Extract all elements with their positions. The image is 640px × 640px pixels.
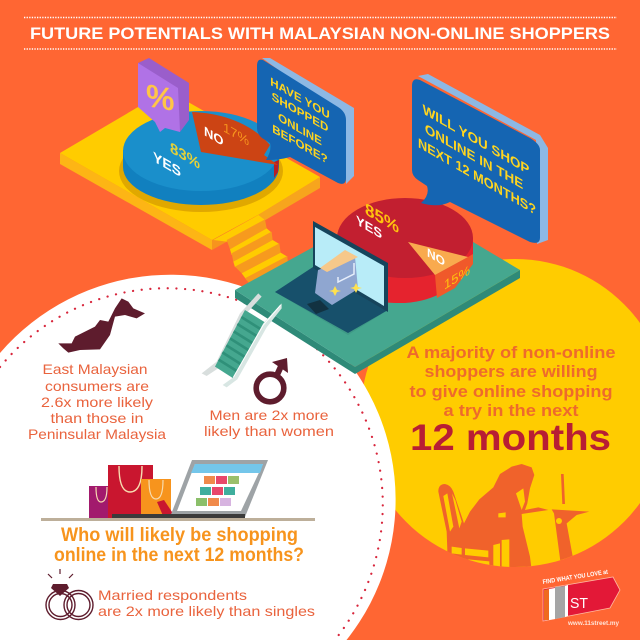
heading: who will likely be shopping bbox=[54, 524, 304, 566]
statement: majority of non-online shoppers: to give online shopping bbox=[410, 383, 612, 401]
question text: HAVE YOU bbox=[270, 75, 330, 122]
icon: shopping bag bbox=[315, 250, 362, 305]
text: East Malaysian consumers bbox=[28, 361, 166, 442]
question text: SHOPPED bbox=[272, 89, 328, 135]
question text: WILL YOU SHOP bbox=[423, 102, 530, 179]
text: married respondents: Married respondents bbox=[98, 587, 247, 603]
text: married respondents bbox=[98, 587, 315, 619]
text: East Malaysian consumers: 2.6x more likely bbox=[41, 394, 153, 410]
yellow circle background bbox=[361, 259, 640, 567]
text: men more likely bbox=[204, 407, 334, 439]
icon: male symbol bbox=[256, 358, 288, 402]
question text: ONLINE bbox=[278, 110, 322, 148]
pie label: 17% no: 17% bbox=[223, 119, 249, 149]
text: East Malaysian consumers: Peninsular Malaysia bbox=[28, 426, 166, 442]
question text: BEFORE? bbox=[272, 122, 328, 167]
big text: 12 months: 12 months bbox=[410, 417, 611, 458]
pie label: 83% yes: YES bbox=[153, 149, 181, 181]
icon: percent bubble bbox=[138, 58, 189, 132]
text: East Malaysian consumers: consumers are bbox=[45, 378, 149, 394]
silhouette: woman at desk bbox=[438, 464, 589, 570]
statement: majority of non-online shoppers: A majority of non-online bbox=[406, 344, 616, 362]
yellow staircase bbox=[213, 215, 288, 285]
pie chart: have you shopped online bbox=[119, 111, 283, 212]
icon: map of Malaysia bbox=[58, 298, 145, 353]
statement: majority of non-online shoppers bbox=[406, 344, 616, 458]
pie label: 85% yes: 85% bbox=[365, 198, 399, 237]
red bag bbox=[108, 465, 153, 518]
speech bubble: have you shopped online before bbox=[257, 58, 354, 184]
pie label: 85% yes: YES bbox=[356, 212, 382, 242]
heading: who will likely be shopping: Who will likely be shopping bbox=[61, 524, 298, 546]
pie label: 15% no: 15% bbox=[444, 263, 470, 294]
pie label: 17% no bbox=[204, 119, 249, 149]
green platform bbox=[235, 199, 520, 374]
laptop bbox=[170, 460, 268, 517]
pie label: 17% no: NO bbox=[204, 123, 224, 149]
pie chart: will you shop online bbox=[337, 198, 473, 303]
title: FUTURE POTENTIALS WITH MALAYSIAN NON-ONLINE SHOPPERS bbox=[30, 24, 610, 43]
orange bag bbox=[141, 479, 171, 518]
laptop with shopping bag bbox=[275, 221, 388, 335]
question text: ONLINE IN THE bbox=[425, 122, 523, 193]
question text bbox=[418, 102, 536, 219]
logo: 11street: ST bbox=[570, 595, 588, 612]
heading: who will likely be shopping: online in the next 12 months? bbox=[54, 544, 304, 566]
question text: NEXT 12 MONTHS? bbox=[418, 136, 536, 219]
statement: majority of non-online shoppers: a try in the next bbox=[444, 402, 579, 420]
text: East Malaysian consumers: than those in bbox=[50, 410, 144, 426]
pie label: 83% yes: 83% bbox=[170, 139, 200, 173]
question text bbox=[270, 75, 330, 167]
text: East Malaysian consumers: East Malaysian bbox=[42, 361, 148, 377]
text: married respondents: are 2x more likely than singles bbox=[98, 603, 315, 619]
icon: percent bubble: % bbox=[146, 77, 174, 118]
text: men more likely: Men are 2x more bbox=[210, 407, 329, 423]
pie label: 15% no: NO bbox=[427, 245, 445, 269]
shelf bbox=[41, 518, 315, 521]
icon: wedding rings bbox=[46, 569, 93, 620]
pie label: 83% yes bbox=[153, 139, 200, 181]
illustration: shopping bags and laptop on shelf bbox=[41, 460, 315, 521]
speech bubble: will you shop online bbox=[412, 74, 548, 244]
text: men more likely: likely than women bbox=[204, 423, 334, 439]
logo: 11street bbox=[542, 569, 620, 627]
white circle panel bbox=[0, 275, 396, 640]
purple bag bbox=[89, 486, 108, 518]
statement: majority of non-online shoppers: shoppers are willing bbox=[424, 363, 598, 381]
yellow platform with stairs bbox=[60, 90, 320, 285]
green staircase bbox=[202, 293, 282, 387]
pie label: 15% no bbox=[427, 245, 470, 294]
logo: 11street: www.11street.my bbox=[567, 621, 620, 627]
logo tagline: FIND WHAT YOU LOVE at bbox=[542, 569, 609, 586]
